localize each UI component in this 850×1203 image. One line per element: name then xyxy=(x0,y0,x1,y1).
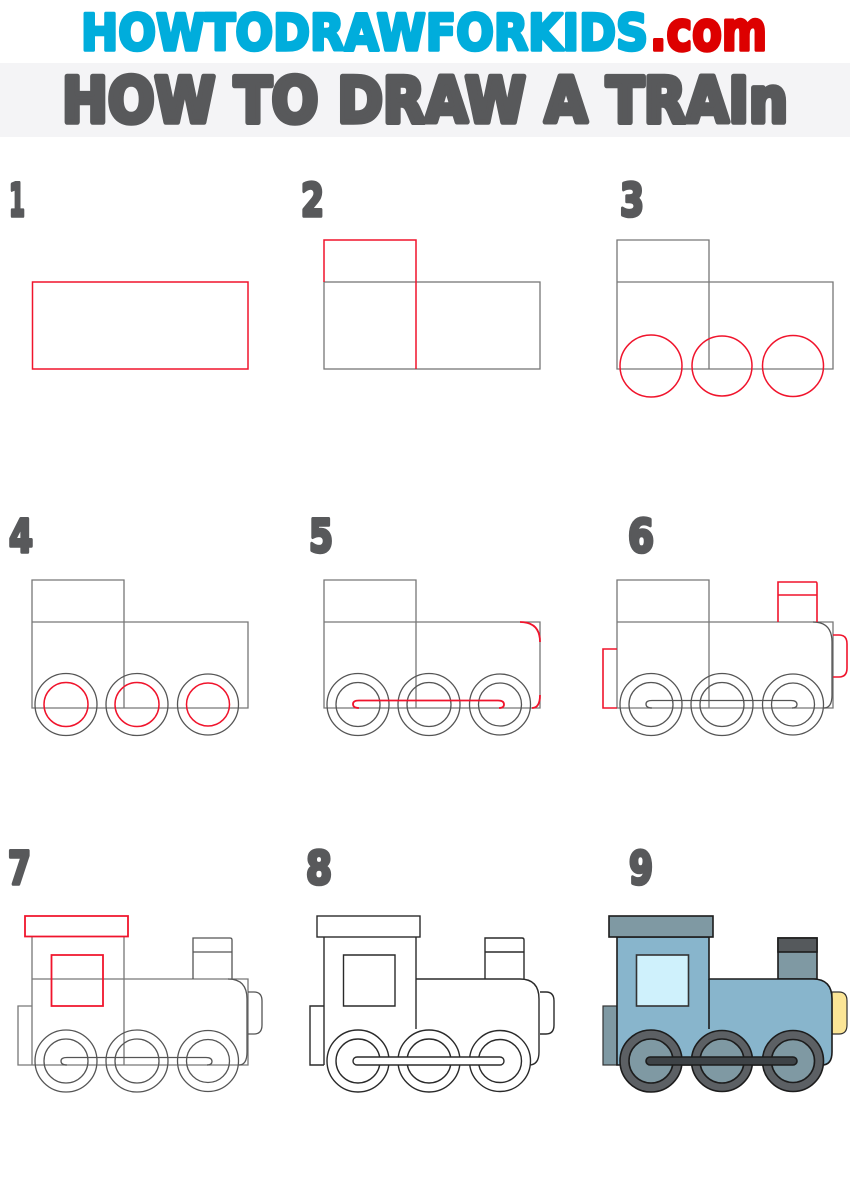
step 1 xyxy=(9,174,248,369)
number 7: 7 xyxy=(8,842,31,895)
number 8: 8 xyxy=(306,842,332,895)
step 9 xyxy=(603,842,847,1092)
drawing: clean outline xyxy=(310,916,554,1092)
lamp xyxy=(832,992,847,1034)
number 6: 6 xyxy=(628,510,654,563)
roof xyxy=(609,916,713,937)
drawing: wheels added xyxy=(617,240,833,397)
step 7 xyxy=(8,842,262,1092)
site logo: HOWTODRAWFORKIDS xyxy=(81,4,648,62)
connecting rod xyxy=(646,1057,797,1065)
title band xyxy=(0,63,850,137)
train body and cab xyxy=(617,937,832,1065)
drawing: body rectangle xyxy=(32,282,248,369)
chimney xyxy=(778,938,817,979)
number 5: 5 xyxy=(309,510,333,563)
drawing: cab added xyxy=(324,240,540,369)
wheels xyxy=(620,1030,824,1092)
drawing: chimney, lamp and rear added xyxy=(603,580,847,736)
step 8 xyxy=(306,842,554,1092)
number 4: 4 xyxy=(9,510,33,563)
drawing: inner wheels added xyxy=(32,580,248,736)
number 2: 2 xyxy=(301,174,324,227)
drawing: roof and window added xyxy=(18,916,262,1092)
drawing: rounded corners and rod added xyxy=(324,580,540,736)
window xyxy=(636,955,688,1006)
number 9: 9 xyxy=(629,842,653,895)
step 3 xyxy=(617,174,833,397)
step 4 xyxy=(9,510,248,736)
number 1: 1 xyxy=(9,174,25,227)
rear buffer xyxy=(603,1006,617,1065)
step 6 xyxy=(603,510,847,736)
step 5 xyxy=(309,510,540,736)
drawing: coloured train xyxy=(603,916,847,1092)
number 3: 3 xyxy=(620,174,644,227)
step 2 xyxy=(301,174,540,369)
site logo: .com xyxy=(650,0,767,63)
